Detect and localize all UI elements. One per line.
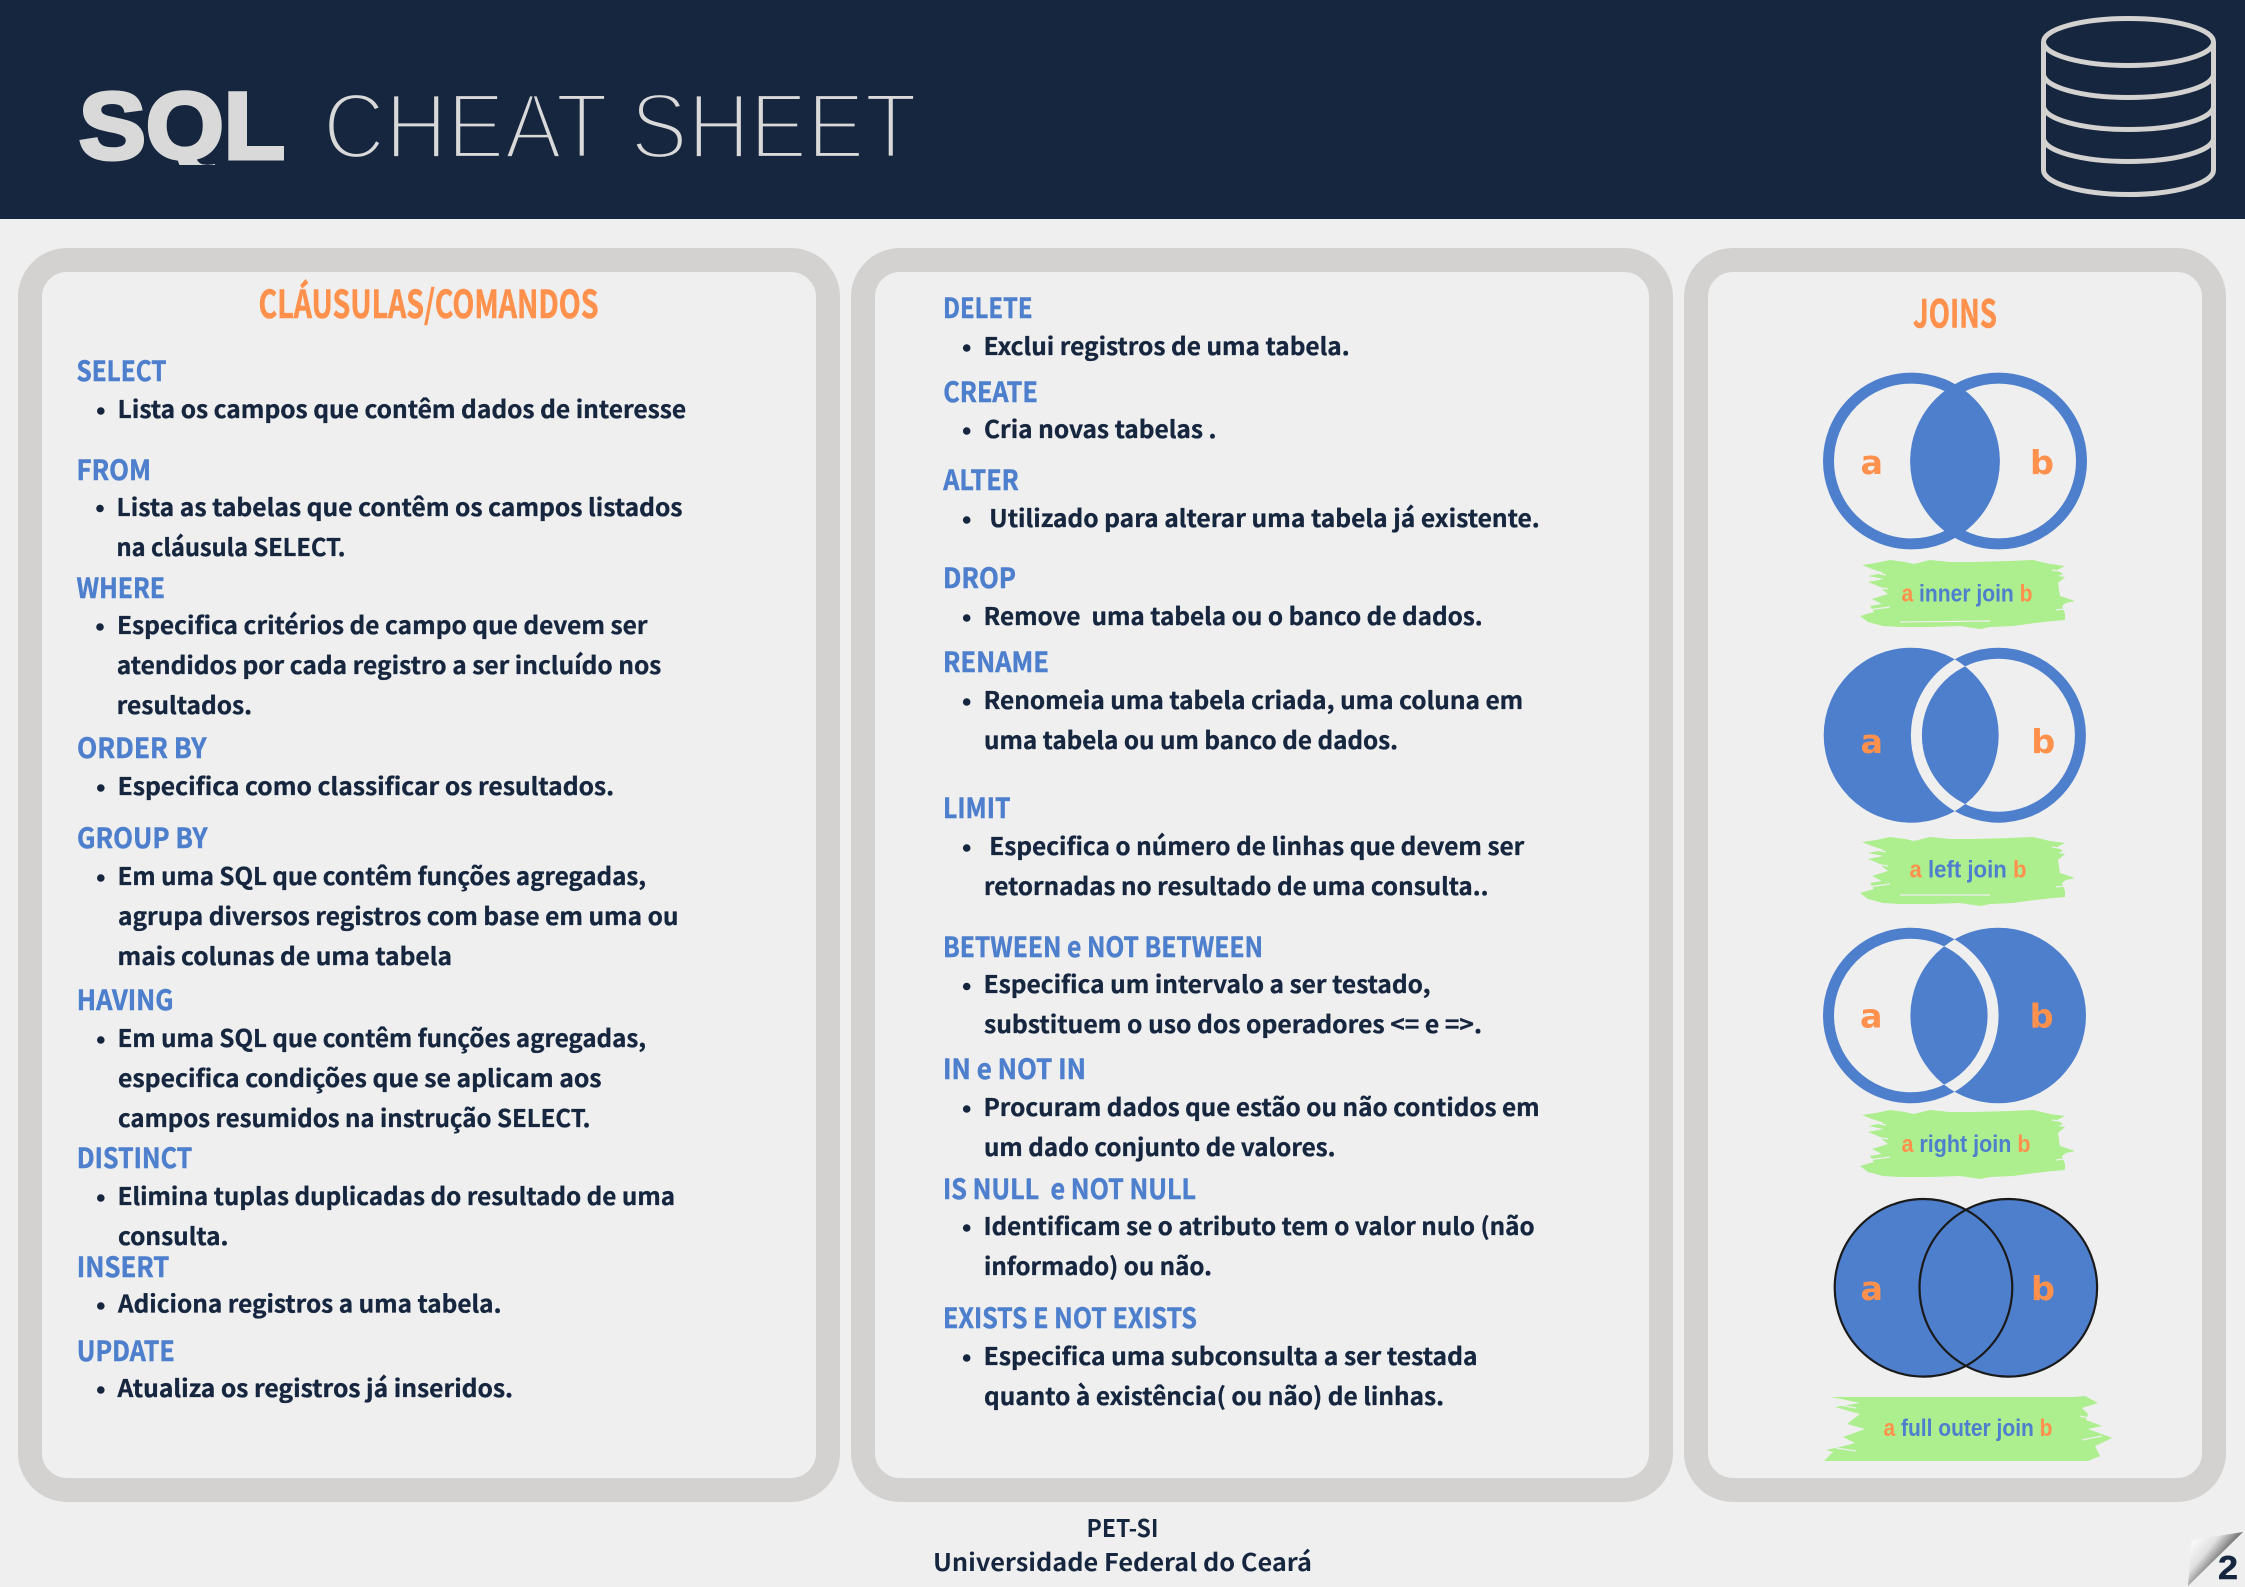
entry: RENAME: RENAME bbox=[943, 640, 1049, 680]
entry: SELECT: SELECT bbox=[76, 349, 166, 389]
diagram: inner join: a bbox=[1860, 443, 1883, 482]
entry: BETWEEN e NOT BETWEEN: BETWEEN e NOT BETWEEN bbox=[943, 925, 1263, 965]
entry: IS NULL e NOT NULL bbox=[943, 1167, 1535, 1282]
entry: CREATE bbox=[943, 370, 1216, 445]
entry: LIMIT: retornadas no resultado de uma consulta.. bbox=[984, 867, 1488, 902]
entry: UPDATE: UPDATE bbox=[77, 1329, 175, 1369]
entry: RENAME: uma tabela ou um banco de dados. bbox=[984, 721, 1398, 756]
entry: SELECT bbox=[76, 349, 686, 425]
label: a right join b: a right join b bbox=[1902, 1131, 2030, 1158]
entry: DISTINCT: Elimina tuplas duplicadas do resultado de uma bbox=[118, 1177, 675, 1212]
entry: GROUP BY: GROUP BY bbox=[77, 816, 208, 856]
entry: EXISTS E NOT EXISTS bbox=[943, 1296, 1478, 1412]
entry: ALTER bbox=[942, 458, 1540, 534]
diagram: inner join bbox=[1828, 373, 2087, 549]
entry: RENAME bbox=[943, 640, 1523, 756]
page number with curled corner bbox=[2188, 1532, 2243, 1586]
panel: clauses and commands bbox=[30, 260, 828, 1490]
diagram: left join bbox=[1824, 648, 2080, 823]
entry: DELETE bbox=[943, 286, 1350, 362]
entry: HAVING: HAVING bbox=[77, 978, 174, 1018]
entry: BETWEEN e NOT BETWEEN: substituem o uso dos operadores <= e =>. bbox=[984, 1005, 1482, 1040]
page number with curled corner: 2 bbox=[2218, 1549, 2238, 1586]
entry: IN e NOT IN bbox=[943, 1047, 1540, 1163]
entry: LIMIT: Especifica o número de linhas que devem ser bbox=[989, 827, 1525, 862]
entry: WHERE: WHERE bbox=[76, 566, 165, 606]
entry: INSERT bbox=[77, 1245, 502, 1320]
entry: LIMIT bbox=[943, 786, 1525, 902]
entry: IS NULL e NOT NULL: IS NULL e NOT NULL bbox=[943, 1167, 1196, 1207]
entry: HAVING bbox=[77, 978, 646, 1134]
diagram: right join bbox=[1828, 928, 2086, 1103]
entry: CREATE: CREATE bbox=[943, 370, 1038, 410]
heading: CLÁUSULAS/COMANDOS: CLÁUSULAS/COMANDOS bbox=[258, 274, 598, 330]
entry: FROM: Lista as tabelas que contêm os campos listados bbox=[116, 488, 683, 523]
entry: CREATE: Cria novas tabelas . bbox=[984, 410, 1216, 445]
entry: LIMIT: LIMIT bbox=[943, 786, 1010, 826]
title: CHEAT SHEET: CHEAT SHEET bbox=[323, 74, 917, 178]
label: a full outer join b bbox=[1824, 1396, 2112, 1461]
entry: HAVING: campos resumidos na instrução SELECT. bbox=[118, 1099, 590, 1134]
entry: UPDATE: Atualiza os registros já inseridos. bbox=[116, 1369, 513, 1404]
footer credit: Universidade Federal do Ceará bbox=[933, 1543, 1312, 1578]
entry: FROM: na cláusula SELECT. bbox=[116, 528, 346, 563]
entry: IS NULL e NOT NULL: informado) ou não. bbox=[984, 1247, 1212, 1282]
entry: WHERE: Especifica critérios de campo que devem ser bbox=[117, 606, 648, 641]
entry: DROP bbox=[943, 556, 1483, 632]
label: a left join b: a left join b bbox=[1910, 856, 2026, 883]
entry: INSERT: INSERT bbox=[77, 1245, 169, 1285]
header band bbox=[0, 0, 2245, 219]
label: a inner join b bbox=[1860, 560, 2075, 629]
diagram: left join: b bbox=[2031, 722, 2055, 761]
entry: BETWEEN e NOT BETWEEN: Especifica um intervalo a ser testado, bbox=[984, 965, 1431, 1000]
entry: HAVING: especifica condições que se aplicam aos bbox=[118, 1059, 602, 1094]
diagram: full outer join: b bbox=[2031, 1269, 2055, 1308]
footer credit bbox=[933, 1509, 1312, 1578]
panel: joins bbox=[1696, 260, 2214, 1490]
icon: database cylinder bbox=[2044, 18, 2214, 194]
label: a full outer join b: a full outer join b bbox=[1884, 1415, 2052, 1442]
title: SQL: SQL bbox=[79, 74, 285, 180]
entry: FROM: FROM bbox=[76, 448, 151, 488]
label: a left join b bbox=[1860, 837, 2075, 906]
entry: SELECT: Lista os campos que contêm dados de interesse bbox=[118, 390, 686, 425]
diagram: full outer join bbox=[1835, 1199, 2097, 1377]
panel: more commands bbox=[863, 260, 1661, 1490]
diagram: full outer join: a bbox=[1860, 1269, 1883, 1308]
entry: DELETE: Exclui registros de uma tabela. bbox=[984, 327, 1350, 362]
entry: GROUP BY: Em uma SQL que contêm funções agregadas, bbox=[118, 857, 646, 892]
entry: FROM bbox=[76, 448, 683, 563]
entry: UPDATE bbox=[77, 1329, 513, 1404]
entry: DISTINCT: DISTINCT bbox=[77, 1136, 192, 1176]
entry: INSERT: Adiciona registros a uma tabela. bbox=[117, 1285, 502, 1320]
diagram: left join: a bbox=[1860, 722, 1883, 761]
entry: DROP: DROP bbox=[943, 556, 1016, 596]
diagram: right join: b bbox=[2030, 996, 2054, 1036]
entry: GROUP BY bbox=[77, 816, 678, 972]
label: a inner join b: a inner join b bbox=[1902, 581, 2032, 608]
entry: ORDER BY: Especifica como classificar os resultados. bbox=[118, 767, 614, 802]
entry: RENAME: Renomeia uma tabela criada, uma coluna em bbox=[984, 681, 1523, 716]
entry: ORDER BY bbox=[77, 726, 614, 802]
entry: EXISTS E NOT EXISTS: quanto à existência( ou não) de linhas. bbox=[984, 1377, 1444, 1412]
entry: ALTER: ALTER bbox=[942, 458, 1019, 498]
entry: BETWEEN e NOT BETWEEN bbox=[943, 925, 1482, 1040]
footer credit: PET-SI bbox=[1086, 1509, 1158, 1544]
entry: HAVING: Em uma SQL que contêm funções agregadas, bbox=[118, 1019, 646, 1054]
entry: WHERE bbox=[76, 566, 661, 721]
entry: ALTER: Utilizado para alterar uma tabela já existente. bbox=[989, 499, 1540, 534]
entry: EXISTS E NOT EXISTS: EXISTS E NOT EXISTS bbox=[943, 1296, 1197, 1336]
entry: IN e NOT IN: IN e NOT IN bbox=[943, 1047, 1086, 1087]
entry: IN e NOT IN: um dado conjunto de valores. bbox=[984, 1128, 1336, 1163]
entry: WHERE: atendidos por cada registro a ser incluído nos bbox=[117, 646, 661, 681]
entry: GROUP BY: agrupa diversos registros com base em uma ou bbox=[118, 897, 678, 932]
entry: EXISTS E NOT EXISTS: Especifica uma subconsulta a ser testada bbox=[984, 1337, 1478, 1372]
diagram: inner join: b bbox=[2030, 443, 2054, 482]
label: a right join b bbox=[1860, 1110, 2075, 1179]
entry: DELETE: DELETE bbox=[943, 286, 1032, 326]
entry: IS NULL e NOT NULL: Identificam se o atributo tem o valor nulo (não bbox=[984, 1207, 1535, 1242]
entry: WHERE: resultados. bbox=[117, 686, 252, 721]
diagram: right join: a bbox=[1860, 996, 1882, 1036]
entry: IN e NOT IN: Procuram dados que estão ou não contidos em bbox=[984, 1088, 1540, 1123]
entry: DISTINCT: consulta. bbox=[118, 1217, 228, 1252]
entry: ORDER BY: ORDER BY bbox=[77, 726, 207, 766]
heading: JOINS: JOINS bbox=[1913, 284, 1997, 340]
entry: DISTINCT bbox=[77, 1136, 675, 1252]
entry: GROUP BY: mais colunas de uma tabela bbox=[118, 937, 452, 972]
entry: DROP: Remove uma tabela ou o banco de dados. bbox=[984, 597, 1483, 632]
